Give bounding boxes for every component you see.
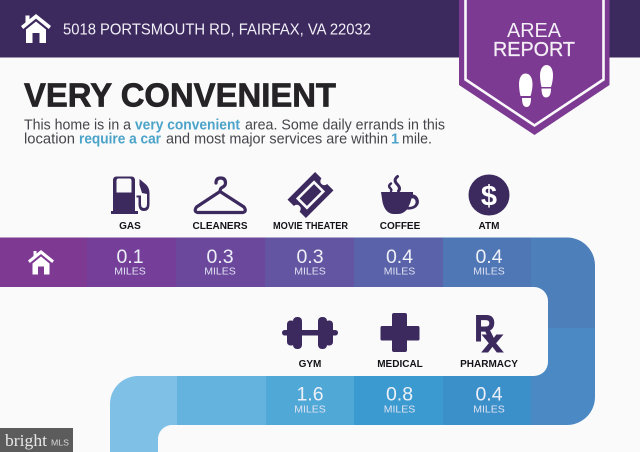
icon: gas pump	[111, 176, 150, 214]
stop: cleaners: 0.3	[206, 246, 234, 268]
stop: gym: GYM	[299, 359, 321, 370]
badge: area report	[459, 0, 610, 135]
stop: movie theater: 0.3	[296, 246, 324, 268]
stop: gym	[282, 317, 338, 416]
logo: bright MLS: MLS	[51, 438, 69, 448]
stop: cleaners: MILES	[204, 266, 236, 278]
stop: coffee: MILES	[384, 266, 415, 278]
stop: medical	[377, 313, 423, 416]
badge title: REPORT	[493, 38, 575, 61]
icon: ticket	[288, 172, 333, 218]
stop: gas	[111, 176, 150, 278]
stop: gas: 0.1	[116, 246, 144, 268]
stop: gas: MILES	[114, 266, 146, 278]
icon: hanger	[195, 178, 245, 212]
description text: require a car	[79, 132, 161, 148]
steam	[389, 176, 399, 191]
stop: atm: MILES	[473, 266, 505, 278]
stop: cleaners: CLEANERS	[192, 221, 248, 232]
stop: pharmacy	[460, 308, 518, 416]
description text: area. Some daily errands in this	[245, 118, 445, 134]
address: 5018 PORTSMOUTH RD, FAIRFAX, VA 22032	[63, 22, 371, 38]
icon: house	[21, 14, 51, 43]
stop: home	[28, 250, 54, 274]
stop: pharmacy: MILES	[473, 404, 505, 416]
logo: bright MLS: bright	[5, 431, 47, 450]
icon: coffee cup	[381, 192, 419, 214]
stop: movie theater: MOVIE THEATER	[273, 221, 349, 232]
icon: prescription symbol: x	[482, 323, 503, 359]
title: VERY CONVENIENT	[24, 76, 336, 114]
stop: gas: GAS	[119, 221, 141, 232]
stop: pharmacy: 0.4	[475, 384, 503, 406]
header bar	[0, 0, 640, 58]
stop: pharmacy: PHARMACY	[460, 359, 518, 370]
stop: atm: 0.4	[475, 246, 503, 268]
stop: coffee: COFFEE	[380, 221, 421, 232]
stop: gym: MILES	[294, 404, 326, 416]
stop: cleaners	[192, 178, 248, 278]
stop: medical: MEDICAL	[377, 359, 423, 370]
description text: 1	[391, 132, 399, 148]
stop: medical: 0.8	[386, 384, 413, 406]
description text: and most major services are within	[166, 132, 388, 148]
description text: This home is in a	[24, 118, 132, 134]
stop: atm	[468, 174, 510, 278]
description text: mile.	[402, 132, 432, 148]
stop: movie theater	[273, 172, 349, 278]
home segment	[0, 238, 87, 287]
stop: coffee: 0.4	[386, 246, 413, 268]
stop: atm: ATM	[479, 221, 499, 232]
icon: footprints	[519, 65, 553, 107]
description text: very convenient	[135, 118, 240, 134]
stop: movie theater: MILES	[294, 266, 326, 278]
badge title: AREA	[507, 19, 561, 42]
icon: medical cross	[380, 313, 420, 352]
stop: gym: 1.6	[296, 384, 324, 406]
description text	[24, 118, 445, 148]
icon: prescription symbol: R	[474, 308, 496, 349]
icon: dollar coin: $	[481, 180, 497, 212]
stop: medical: MILES	[384, 404, 415, 416]
badge title	[493, 19, 575, 61]
description text: location	[24, 132, 75, 148]
logo: bright MLS	[0, 428, 73, 452]
icon: dumbbell	[282, 317, 338, 349]
route band	[0, 238, 595, 452]
stop: coffee	[380, 176, 421, 278]
